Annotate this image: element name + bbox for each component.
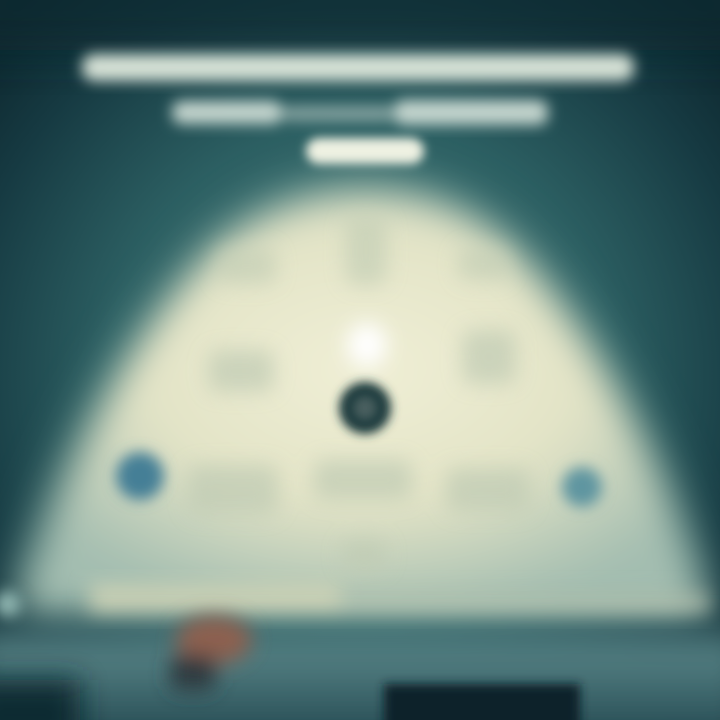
left bottom dark corner — [0, 680, 80, 720]
title: line two — [172, 100, 548, 125]
bright spot — [347, 323, 387, 367]
dark box bottom — [384, 684, 580, 720]
item: top centre — [345, 215, 387, 285]
top dark shade — [0, 0, 720, 50]
row one icons and labels — [218, 215, 508, 285]
item: middle right — [462, 330, 516, 384]
title: line one — [82, 54, 634, 81]
bottom area — [0, 634, 720, 720]
title: pill — [306, 138, 424, 164]
label: left — [188, 465, 278, 515]
right blue circle — [562, 467, 602, 507]
row two icons and labels — [208, 330, 516, 392]
label: right — [446, 468, 530, 512]
hand — [170, 616, 252, 691]
item: middle left — [208, 350, 274, 392]
row three labels — [188, 460, 530, 570]
item: top left — [218, 248, 276, 284]
item: top right — [458, 248, 508, 280]
dome glow — [0, 175, 720, 610]
left blue circle — [116, 452, 164, 500]
left edge light patch — [0, 591, 21, 617]
dome panel — [25, 192, 700, 612]
lower band of dome — [90, 584, 710, 614]
central dark circle — [339, 382, 391, 434]
label: centre — [314, 460, 412, 500]
label: lower centre — [342, 540, 386, 570]
